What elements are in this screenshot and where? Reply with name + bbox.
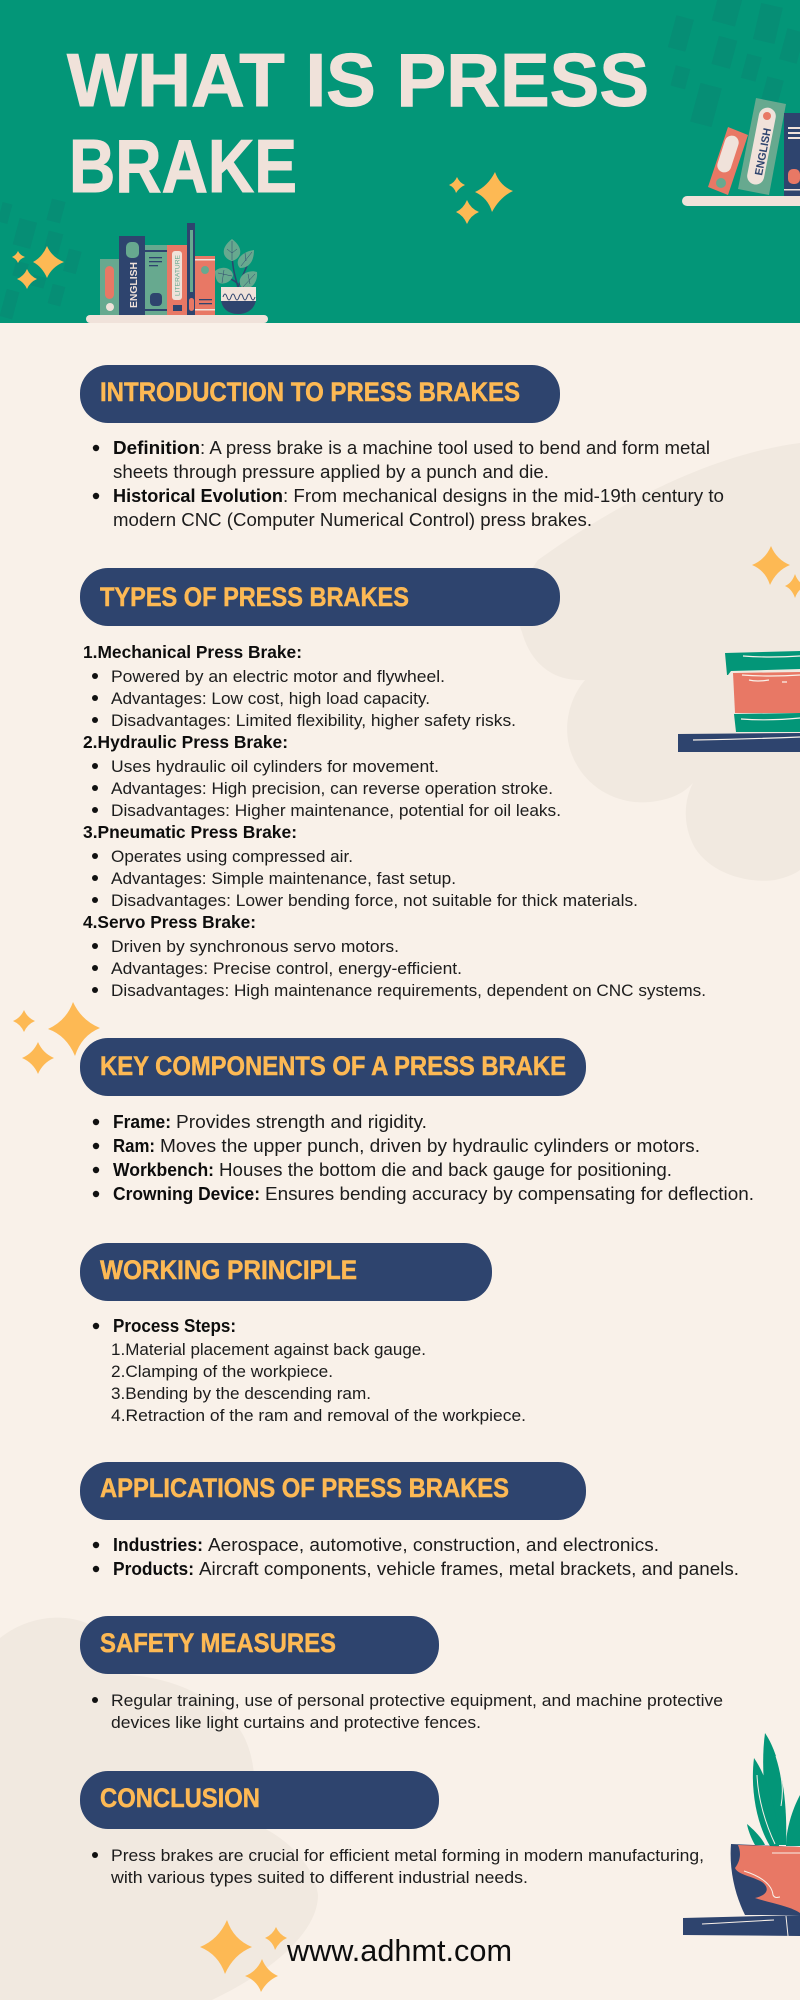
heading: types: TYPES OF PRESS BRAKES	[100, 582, 409, 612]
text block: conclusion: Press brakes are crucial for efficient metal forming in modern manufacturing,	[111, 1847, 704, 1865]
text block: safety: devices like light curtains and protective fences.	[111, 1714, 481, 1732]
text block: introduction bullets	[93, 438, 724, 530]
text block: safety: Regular training, use of personal protective equipment, and machine protective	[111, 1692, 723, 1710]
text block: components: Frame:	[113, 1112, 171, 1132]
book: salmon leaning	[708, 127, 748, 195]
text block: mechanical: Disadvantages: Limited flexibility, higher safety risks.	[111, 712, 516, 730]
heading: conclusion	[80, 1771, 439, 1829]
text block: introduction bullets: : From mechanical designs in the mid-19th century to	[283, 486, 724, 506]
text block: applications: Industries:	[113, 1535, 203, 1555]
website url: www.adhmt.com	[286, 1933, 512, 1968]
text block: conclusion	[92, 1847, 704, 1887]
icon: sparkles bottom	[200, 1920, 287, 1992]
text block: mechanical: Powered by an electric motor and flywheel.	[111, 668, 445, 686]
text block: process steps: Process Steps:	[113, 1316, 236, 1336]
plant leaves	[747, 1733, 800, 1846]
text block: introduction bullets: Historical Evolution	[113, 486, 283, 506]
texture patches: top right	[668, 0, 800, 127]
text block: components: Crowning Device:	[113, 1184, 260, 1204]
text block: servo: Disadvantages: High maintenance requirements, dependent on CNC systems.	[111, 982, 706, 1000]
pot	[731, 1844, 800, 1915]
text block: pneumatic	[83, 822, 638, 910]
heading: introduction: INTRODUCTION TO PRESS BRAKES	[100, 377, 520, 407]
heading: key components: KEY COMPONENTS OF A PRESS BRAKE	[100, 1051, 566, 1081]
text block: applications: Products:	[113, 1559, 194, 1579]
icon: leaning books on shelf	[682, 98, 800, 206]
icon: potted plant on shelf	[683, 1733, 800, 1936]
text block: components: Moves the upper punch, driven by hydraulic cylinders or motors.	[160, 1136, 700, 1156]
heading: types	[80, 568, 560, 626]
text block: applications	[93, 1535, 739, 1579]
book: navy	[784, 113, 800, 196]
text block: process steps: 4.Retraction of the ram and removal of the workpiece.	[111, 1407, 526, 1425]
text block: components: Ram:	[113, 1136, 155, 1156]
book: English	[119, 236, 145, 315]
text block: process steps: 3.Bending by the descending ram.	[111, 1385, 371, 1403]
text block: components: Workbench:	[113, 1160, 214, 1180]
shelf	[683, 1915, 800, 1936]
text block: components	[93, 1112, 754, 1204]
panel: introduction	[80, 365, 724, 530]
icon: sparkles mid-left	[13, 1002, 100, 1074]
book: English leaning: ENGLISH	[753, 127, 774, 177]
icon: sparkles centre header	[449, 172, 513, 224]
text block: process steps: 1.Material placement against back gauge.	[111, 1341, 426, 1359]
book: salmon	[195, 256, 215, 315]
text block: components: Houses the bottom die and back gauge for positioning.	[219, 1160, 672, 1180]
heading: applications: APPLICATIONS OF PRESS BRAKES	[100, 1473, 509, 1503]
icon: sparkles right	[752, 546, 800, 598]
heading: applications	[80, 1462, 586, 1520]
text block: servo: 4.Servo Press Brake:	[83, 912, 256, 932]
heading: conclusion: CONCLUSION	[100, 1783, 260, 1813]
text block: process steps	[93, 1316, 526, 1425]
text block: introduction bullets: : A press brake is a machine tool used to bend and form metal	[200, 438, 710, 458]
text block: pneumatic: Advantages: Simple maintenance, fast setup.	[111, 870, 456, 888]
text block: pneumatic: Disadvantages: Lower bending force, not suitable for thick materials.	[111, 892, 638, 910]
text block: servo: Driven by synchronous servo motors.	[111, 938, 399, 956]
text block: hydraulic: Uses hydraulic oil cylinders for movement.	[111, 758, 439, 776]
text block: applications: Aircraft components, vehicle frames, metal brackets, and panels.	[199, 1559, 739, 1579]
heading: safety measures	[80, 1616, 439, 1674]
panel: conclusion	[80, 1771, 704, 1887]
text block: mechanical: Advantages: Low cost, high load capacity.	[111, 690, 430, 708]
title	[67, 38, 649, 208]
text block: pneumatic: Operates using compressed air.	[111, 848, 353, 866]
text block: applications: Aerospace, automotive, construction, and electronics.	[208, 1535, 659, 1555]
heading: working principle: WORKING PRINCIPLE	[100, 1255, 357, 1285]
title: WHAT IS PRESS	[67, 38, 649, 122]
title: BRAKE	[69, 124, 297, 208]
text block: components: Ensures bending accuracy by compensating for deflection.	[265, 1184, 754, 1204]
panel: applications	[80, 1462, 739, 1579]
text block: introduction bullets: modern CNC (Computer Numerical Control) press brakes.	[113, 510, 592, 530]
icon: bookshelf with plant	[86, 223, 268, 323]
book: green	[100, 259, 119, 315]
panel: safety measures	[80, 1616, 723, 1732]
book: English: ENGLISH	[128, 262, 140, 308]
text block: introduction bullets: Definition	[113, 438, 200, 458]
text block: servo: Advantages: Precise control, energy-efficient.	[111, 960, 462, 978]
book: Literature: LITERATURE	[176, 255, 182, 296]
potted plant	[215, 239, 257, 314]
book: Literature	[167, 245, 187, 315]
icon: sparkles left header	[12, 246, 64, 289]
text block: hydraulic: Disadvantages: Higher maintenance, potential for oil leaks.	[111, 802, 561, 820]
text block: hydraulic	[83, 732, 561, 820]
heading: safety measures: SAFETY MEASURES	[100, 1628, 336, 1658]
text block: servo	[83, 912, 706, 1000]
header band	[0, 0, 800, 323]
text block: hydraulic: 2.Hydraulic Press Brake:	[83, 732, 288, 752]
text block: introduction bullets: sheets through pressure applied by a punch and die.	[113, 462, 549, 482]
text block: pneumatic: 3.Pneumatic Press Brake:	[83, 822, 297, 842]
text block: conclusion: with various types suited to different industrial needs.	[110, 1869, 528, 1887]
background blob: right cloud	[518, 443, 800, 881]
text block: mechanical: 1.Mechanical Press Brake:	[83, 642, 302, 662]
text block: mechanical	[83, 642, 516, 730]
text block: components: Provides strength and rigidity.	[176, 1112, 427, 1132]
text block: process steps: 2.Clamping of the workpiece.	[111, 1363, 333, 1381]
background blob: bottom-left cloud	[0, 1618, 318, 2000]
heading: introduction	[80, 365, 560, 423]
panel: types	[80, 568, 706, 1000]
panel: key components	[80, 1038, 754, 1204]
panel: working principle	[80, 1243, 526, 1425]
icon: book stack on shelf	[678, 651, 800, 752]
book: thin navy	[187, 223, 195, 315]
texture patches: left	[0, 199, 82, 319]
book: green with lines	[145, 245, 167, 315]
text block: safety	[92, 1692, 723, 1732]
heading: key components	[80, 1038, 586, 1096]
text block: hydraulic: Advantages: High precision, can reverse operation stroke.	[111, 780, 553, 798]
heading: working principle	[80, 1243, 492, 1301]
